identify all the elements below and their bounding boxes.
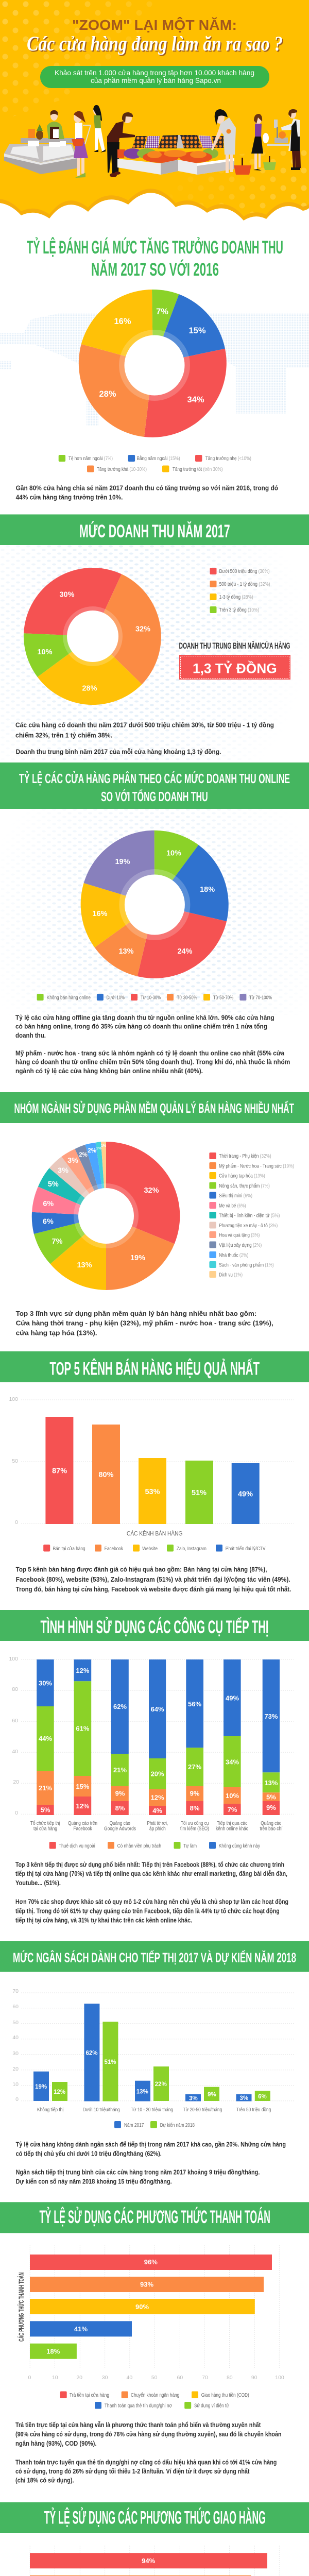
- donut chart: 6%: [43, 1200, 54, 1208]
- axis labels: tìm kiếm (SEO): [180, 1825, 209, 1832]
- bar chart: 80%: [98, 1471, 114, 1479]
- heading band: [0, 2502, 309, 2533]
- horizontal bar chart: 10: [52, 2375, 58, 2381]
- panel: marketing tools: [0, 1610, 309, 1924]
- average revenue callout: 1,3 TỶ ĐỒNG: [193, 660, 277, 676]
- bar: Facebook ads: 61%: [76, 1725, 90, 1732]
- bar: flyers: [149, 1659, 166, 1815]
- bar: flyers: 20%: [151, 1770, 164, 1777]
- donut chart: 19%: [130, 1254, 145, 1262]
- stacked bar chart: 100: [9, 1656, 18, 1662]
- bar: in-store marketing: 21%: [39, 1784, 52, 1792]
- bar: press ads: 5%: [266, 1793, 276, 1801]
- panel: header: [0, 0, 309, 242]
- grouped bar chart: 3%: [189, 2096, 198, 2102]
- horizontal bar chart: 40: [127, 2375, 132, 2381]
- halftone background: [0, 809, 309, 1015]
- body text: Cửa hàng thời trang - phụ kiện (32%), mỹ phẩm - nước hoa - trang sức (19%),: [16, 1319, 273, 1327]
- axis labels: áp phích: [149, 1826, 166, 1832]
- donut chart: [32, 1142, 180, 1290]
- grouped bar chart: 22%: [155, 2081, 167, 2088]
- bar: Google Adwords: 8%: [115, 1804, 125, 1812]
- legend: Không dùng kênh này: [219, 1843, 261, 1849]
- body text: Doanh thu trung bình năm 2017 của mỗi cửa hàng khoảng 1,3 tỷ đồng.: [16, 748, 221, 755]
- body text: có sử dụng, trong đó 26% sử dụng tối thiểu 1-2 lần/tuần. Ví điện tử ít được sử dụng nhất: [15, 2467, 250, 2475]
- legend: Tăng trưởng nhẹ (<10%): [205, 455, 251, 462]
- stacked bar chart: 20: [13, 1779, 19, 1785]
- donut chart: 5%: [48, 1180, 59, 1189]
- grouped bar chart: 10: [12, 2081, 19, 2088]
- axis labels: Quảng cáo: [110, 1821, 130, 1826]
- legend: Sử dụng ví điện tử: [194, 2403, 229, 2409]
- legend: Hoa và quà tặng (3%): [219, 1232, 260, 1239]
- bar: Facebook ads: 12%: [76, 1667, 90, 1674]
- axis labels: Tiếp thị qua các: [217, 1820, 247, 1826]
- legend: Vật liệu xây dựng (2%): [219, 1242, 262, 1248]
- horizontal bar chart: [16, 2546, 284, 2576]
- legend: Siêu thị mini (6%): [219, 1193, 252, 1199]
- horizontal bar chart: 96%: [144, 2258, 158, 2266]
- horizontal bar chart: 60: [177, 2375, 183, 2381]
- world map background: [0, 313, 309, 426]
- axis labels: kênh online khác: [216, 1826, 248, 1832]
- body text: Facebook (80%), website (53%), Zalo-Instagram (51%) và phát triển đại lý/cộng tác viên (49%).: [16, 1575, 290, 1583]
- donut chart: 19%: [115, 858, 130, 866]
- body text: Top 3 lĩnh vực sử dụng phần mềm quản lý bán hàng nhiều nhất bao gồm:: [16, 1310, 256, 1317]
- bar: other online channels: 7%: [228, 1806, 237, 1814]
- donut chart: 28%: [99, 389, 116, 399]
- icon: woman in white dress: [211, 109, 236, 173]
- bar: Google Adwords: 21%: [113, 1766, 127, 1774]
- legend: [49, 1842, 261, 1849]
- legend: Từ 30-50%: [177, 994, 197, 1001]
- legend: Thuê dịch vụ ngoài: [59, 1843, 95, 1849]
- bar: press ads: 9%: [266, 1804, 276, 1811]
- legend: Facebook: [105, 1546, 124, 1552]
- donut chart: 1%: [96, 1147, 102, 1150]
- bar: other online channels: 49%: [226, 1694, 239, 1702]
- donut chart: 24%: [177, 947, 193, 956]
- heading band: [0, 514, 309, 545]
- legend: [210, 568, 270, 613]
- bar: press ads: 73%: [264, 1713, 278, 1720]
- heading band: [0, 1351, 309, 1382]
- donut chart: 15%: [188, 326, 206, 335]
- body text: [15, 1860, 288, 1924]
- legend: Nhà thuốc (2%): [219, 1252, 248, 1258]
- axis labels: Tối ưu công cụ: [181, 1820, 209, 1826]
- legend: Phương tiện xe máy - ô tô (3%): [219, 1223, 278, 1229]
- body text: Dự kiến con số này năm 2018 khoảng 15 triệu đồng/tháng.: [16, 2178, 172, 2185]
- axis labels: Quảng cáo trên: [68, 1821, 97, 1826]
- legend: [37, 994, 272, 1001]
- bar chart: 87%: [52, 1467, 67, 1476]
- panel: top 5 sales channels: [0, 1351, 309, 1593]
- illustration: supermarket scene: [4, 105, 301, 178]
- bar chart: [9, 1396, 294, 1537]
- title line 1: "ZOOM" LẠI MỘT NĂM:: [72, 16, 237, 33]
- legend: Tự làm: [183, 1843, 197, 1849]
- heading band: [0, 1941, 309, 1972]
- legend: Dưới 500 triệu đồng (30%): [219, 568, 270, 574]
- body text: (chỉ 18% có sử dụng).: [15, 2476, 74, 2484]
- grouped bar chart: 20: [12, 2066, 19, 2072]
- survey pill: Khảo sát trên 1.000 cửa hàng trong tập hơn 10.000 khách hàng: [55, 69, 254, 77]
- body text: Top 5 kênh bán hàng được đánh giá có hiệu quả bao gồm: Bán hàng tại cửa hàng (87%),: [16, 1566, 267, 1573]
- bar: Google Adwords: 9%: [115, 1790, 125, 1797]
- axis labels: Google Adwords: [104, 1826, 136, 1832]
- legend: Dịch vụ (1%): [219, 1272, 243, 1278]
- bar chart: 50: [12, 1458, 18, 1464]
- body text: Trả tiền trực tiếp tại cửa hàng vẫn là phương thức thanh toán phổ biến và thường xuyên nhất: [15, 2421, 261, 2429]
- axis labels: Facebook: [73, 1826, 93, 1832]
- horizontal bar chart: 30: [102, 2375, 108, 2381]
- bar: other online channels: 10%: [226, 1792, 239, 1800]
- body text: ngân hàng (93%), COD (90%).: [15, 2439, 97, 2447]
- legend: Không bán hàng online: [47, 994, 91, 1001]
- bar chart: 0: [15, 1519, 18, 1526]
- legend: Từ 10-30%: [141, 994, 161, 1001]
- horizontal bar chart: 90%: [135, 2303, 149, 2311]
- survey pill: [40, 66, 269, 88]
- grouped bar chart: [12, 1988, 295, 2113]
- body text: Youtube... (51%).: [15, 1879, 61, 1887]
- icon: left counter: [4, 124, 79, 174]
- bar: other online channels: [224, 1659, 241, 1815]
- legend: Từ 50-70%: [213, 994, 233, 1001]
- heading: NĂM 2017 SO VỚI 2016: [91, 259, 219, 280]
- grouped bar chart: 6%: [258, 2094, 267, 2100]
- horizontal bar chart: CÁC PHƯƠNG THỨC THANH TOÁN: [16, 2273, 25, 2342]
- panel: marketing budget: [0, 1941, 309, 2185]
- axis labels: Tổ chức tiếp thị: [30, 1820, 60, 1826]
- legend: [43, 1545, 265, 1552]
- donut chart: 30%: [59, 590, 75, 599]
- grouped bar chart: 62%: [85, 2050, 98, 2057]
- legend: Chuyển khoản ngân hàng: [131, 2392, 179, 2398]
- donut chart: 32%: [144, 1187, 159, 1195]
- icon: cashier: [47, 110, 64, 139]
- grouped bar chart: 30: [12, 2050, 19, 2057]
- legend: Bán tại cửa hàng: [53, 1546, 85, 1552]
- body text: có tiếp thị chủ yếu chi dưới 10 triệu đồng/tháng (62%).: [16, 2150, 162, 2158]
- legend: Giao hàng thu tiền (COD): [201, 2392, 249, 2398]
- grouped bar chart: 70: [12, 1988, 19, 1994]
- legend: 500 triệu - 1 tỷ đồng (32%): [219, 581, 270, 587]
- legend: Có nhân viên phụ trách: [117, 1843, 161, 1849]
- icon: woman with basket: [72, 111, 91, 178]
- bar: Facebook ads: 15%: [76, 1783, 90, 1790]
- grouped bar chart: 51%: [104, 2059, 116, 2065]
- icon: man bending: [107, 112, 135, 177]
- icon: woman with long hair: [93, 105, 106, 152]
- heading band: [0, 1092, 309, 1123]
- heading band: [0, 762, 309, 809]
- stacked bar chart: 60: [12, 1718, 18, 1724]
- grouped bar chart: 60: [12, 2004, 19, 2010]
- legend: Nông sản, thực phẩm (7%): [219, 1183, 270, 1189]
- axis labels: [30, 1820, 283, 1832]
- horizontal bar chart: 20: [76, 2375, 82, 2381]
- grouped bar chart: 0: [15, 2096, 19, 2103]
- body text: tiếp thị tại cửa hàng, và 31% tự khai thác trên các kênh online khác.: [15, 1916, 192, 1924]
- heading band: [0, 2202, 309, 2233]
- donut chart: 32%: [135, 625, 150, 634]
- grouped bar chart: Dưới 10 triệu/tháng: [83, 2107, 120, 2113]
- axis labels: Phát tờ rơi,: [147, 1821, 168, 1826]
- donut chart: 6%: [43, 1218, 54, 1226]
- legend: Dưới 10%: [107, 994, 125, 1001]
- bar: in-store marketing: 30%: [39, 1680, 52, 1687]
- grouped bar chart: 19%: [35, 2084, 47, 2090]
- donut chart: [24, 568, 161, 705]
- legend: Năm 2017: [124, 2122, 144, 2128]
- donut chart: 13%: [118, 947, 134, 956]
- icon: fruit stand: [117, 135, 234, 175]
- heading: [27, 237, 283, 280]
- body text: 44% cửa hàng tăng trưởng trên 10%.: [16, 494, 123, 501]
- horizontal bar chart: 93%: [140, 2280, 153, 2289]
- legend: [209, 1153, 294, 1278]
- bar: other online channels: 34%: [226, 1758, 239, 1766]
- donut chart: 2%: [88, 1148, 96, 1154]
- bar: SEO: 56%: [188, 1700, 201, 1708]
- horizontal bar chart: 50: [151, 2375, 158, 2381]
- donut chart: 16%: [114, 317, 131, 326]
- donut chart: 13%: [77, 1261, 92, 1269]
- legend: Từ 70-100%: [249, 994, 272, 1001]
- bar: in-store marketing: 44%: [39, 1735, 52, 1742]
- donut chart: 34%: [187, 395, 204, 404]
- grouped bar chart: Không tiếp thị: [37, 2107, 63, 2113]
- body text: Tỷ lệ các cửa hàng offline gia tăng doanh thu từ nguồn online khá lớn. 90% các cửa hàng: [15, 1013, 274, 1021]
- legend: Sách - văn phòng phẩm (1%): [219, 1262, 274, 1268]
- legend: Phát triển đại lý/CTV: [226, 1546, 266, 1552]
- panel: revenue level 2017: [0, 514, 309, 761]
- legend: Bằng năm ngoái (15%): [137, 455, 180, 462]
- body text: Ngân sách tiếp thị trung bình của các cửa hàng trong năm 2017 khoảng 9 triệu đồng/tháng.: [16, 2168, 260, 2176]
- body text: Gần 80% cửa hàng chia sẻ năm 2017 doanh thu có tăng trưởng so với năm 2016, trong đó: [16, 484, 278, 492]
- body text: hàng có doanh thu từ online chiếm trên 50% tổng doanh thu). Trong khi đó, nhà thuốc là nhóm: [15, 1058, 290, 1066]
- body text: [16, 2141, 286, 2185]
- donut chart: [81, 831, 229, 978]
- horizontal bar chart: 0: [28, 2375, 31, 2381]
- horizontal bar chart: 80: [227, 2375, 233, 2381]
- survey pill: của phần mềm quản lý bán hàng Sapo.vn: [91, 76, 221, 84]
- bar chart: 49%: [238, 1490, 253, 1498]
- donut chart: 7%: [156, 307, 168, 316]
- body text: [16, 1566, 291, 1593]
- body text: cửa hàng tạp hóa (13%).: [16, 1329, 97, 1336]
- legend: Thanh toán qua thẻ tín dụng/ghi nợ: [105, 2403, 172, 2409]
- bar: flyers: 4%: [152, 1807, 162, 1815]
- grouped bar chart: 13%: [136, 2089, 148, 2095]
- stacked bar chart: 80: [12, 1686, 18, 1692]
- body text: Các cửa hàng có doanh thu năm 2017 dưới 500 triệu chiếm 30%, từ 500 triệu - 1 tỷ đồng: [15, 721, 274, 729]
- horizontal bar chart: 100: [275, 2375, 284, 2381]
- donut chart: 2%: [79, 1152, 88, 1158]
- white cloud edge: [0, 193, 309, 242]
- legend: [114, 2121, 195, 2128]
- stacked bar chart: 0: [15, 1810, 18, 1816]
- panel: payment methods: [0, 2202, 309, 2484]
- legend: Website: [142, 1546, 158, 1552]
- legend: Dự kiến năm 2018: [160, 2122, 195, 2128]
- bar: press ads: [263, 1659, 280, 1815]
- bar chart: CÁC KÊNH BÁN HÀNG: [127, 1530, 182, 1537]
- legend: Tệ hơn năm ngoái (7%): [68, 455, 113, 462]
- legend: Trả tiền tại cửa hàng: [70, 2392, 109, 2398]
- horizontal bar chart: 41%: [74, 2325, 88, 2333]
- grouped bar chart: Từ 20-50 triệu/tháng: [183, 2107, 222, 2113]
- bar chart: 53%: [145, 1488, 160, 1496]
- horizontal bar chart: 18%: [46, 2347, 60, 2355]
- body text: có bán hàng online, trong đó 35% cửa hàng có doanh thu online chiếm trên 1 nửa tổng: [15, 1023, 267, 1030]
- body text: [16, 1310, 273, 1336]
- bar: SEO: 9%: [190, 1790, 200, 1797]
- grouped bar chart: 50: [12, 2020, 19, 2026]
- legend: Zalo, Instagram: [177, 1546, 207, 1552]
- donut chart: 16%: [92, 910, 108, 918]
- legend: Cửa hàng tạp hóa (13%): [219, 1173, 265, 1179]
- cloud band: [0, 189, 309, 238]
- grouped bar chart: 40: [12, 2035, 19, 2041]
- donut chart: 7%: [52, 1238, 63, 1246]
- legend: Tăng trưởng tốt (trên 30%): [173, 466, 222, 472]
- heading band: SO VỚI TỔNG DOANH THU: [101, 789, 208, 804]
- legend: Trên 3 tỷ đồng (10%): [219, 607, 259, 613]
- bar: Google Adwords: 62%: [113, 1703, 127, 1710]
- legend: Mẹ và bé (6%): [219, 1202, 246, 1209]
- donut chart: 3%: [58, 1166, 68, 1175]
- grouped bar chart: Trên 50 triệu đồng: [236, 2107, 271, 2113]
- axis labels: trên báo chí: [260, 1826, 283, 1832]
- grouped bar chart: 9%: [208, 2092, 216, 2098]
- panel: online revenue share: [0, 762, 309, 1075]
- bar chart: 100: [9, 1396, 18, 1402]
- icon: green basket: [263, 156, 276, 170]
- horizontal bar chart: 90: [251, 2375, 258, 2381]
- average revenue callout: [179, 641, 290, 680]
- icon: scale and clerk: [267, 109, 301, 170]
- body text: ngành có tỷ lệ các cửa hàng không bán online nhiều nhất (40%).: [15, 1067, 203, 1075]
- bar: SEO: [186, 1659, 203, 1815]
- grouped bar chart: Từ 10 - 20 triệu/ tháng: [131, 2107, 173, 2113]
- panel: industries using sales software: [0, 1092, 309, 1336]
- donut chart: 18%: [200, 886, 215, 894]
- axis labels: tại cửa hàng: [33, 1825, 57, 1832]
- donut chart: 28%: [82, 684, 97, 692]
- bar: SEO: 27%: [188, 1763, 201, 1771]
- legend: [60, 2392, 249, 2409]
- donut chart: 10%: [166, 849, 181, 857]
- body text: doanh thu.: [15, 1031, 46, 1039]
- horizontal bar chart: 94%: [142, 2557, 156, 2565]
- grouped bar chart: 12%: [54, 2089, 65, 2095]
- bar: Facebook ads: 12%: [76, 1802, 90, 1810]
- body text: [15, 1013, 290, 1075]
- stacked bar chart: [9, 1656, 294, 1832]
- body text: [15, 721, 274, 755]
- legend: Mỹ phẩm - Nước hoa - Trang sức (19%): [219, 1163, 294, 1170]
- heading band: [0, 1610, 309, 1641]
- icon: red basket: [234, 158, 251, 175]
- donut chart: 3%: [67, 1157, 78, 1165]
- bar: SEO: 8%: [190, 1804, 200, 1812]
- body text: [16, 484, 278, 501]
- bar: in-store marketing: 5%: [41, 1806, 50, 1814]
- axis labels: Quảng cáo: [261, 1821, 282, 1826]
- bar: flyers: 64%: [151, 1705, 164, 1713]
- halftone background: [1, 545, 274, 760]
- bar: Facebook ads: [74, 1659, 91, 1815]
- panel: revenue growth 2017 vs 2016: [0, 237, 309, 501]
- legend: Tăng trưởng khá (10-30%): [97, 466, 147, 472]
- donut chart: 10%: [37, 648, 53, 656]
- body text: Mỹ phẩm - nước hoa - trang sức là nhóm ngành có tỷ lệ doanh thu online cao nhất (55% cửa: [15, 1049, 285, 1057]
- legend: 1-3 tỷ đồng (28%): [219, 594, 253, 600]
- donut chart: 1%: [101, 1144, 107, 1148]
- bar: flyers: 12%: [151, 1794, 164, 1801]
- legend: [59, 455, 251, 472]
- legend: Thiết bị - linh kiện - điện tử (5%): [219, 1213, 280, 1219]
- panel: delivery methods: [0, 2502, 309, 2576]
- horizontal bar chart: [16, 2245, 284, 2381]
- bar: press ads: 13%: [264, 1779, 278, 1787]
- stacked bar chart: 40: [12, 1749, 18, 1755]
- bar: Google Adwords: [111, 1659, 129, 1815]
- icon: woman in black dress: [251, 114, 269, 171]
- body text: chiếm 32%, trên 1 tỷ chiếm 38%.: [15, 732, 112, 739]
- legend: Thời trang - Phụ kiện (32%): [219, 1153, 271, 1159]
- horizontal bar chart: 70: [202, 2375, 208, 2381]
- bar: in-store marketing: [37, 1659, 54, 1815]
- bar chart: 51%: [192, 1489, 207, 1497]
- donut chart: [79, 290, 227, 437]
- grouped bar chart: 3%: [239, 2095, 248, 2102]
- body text: [15, 2421, 282, 2484]
